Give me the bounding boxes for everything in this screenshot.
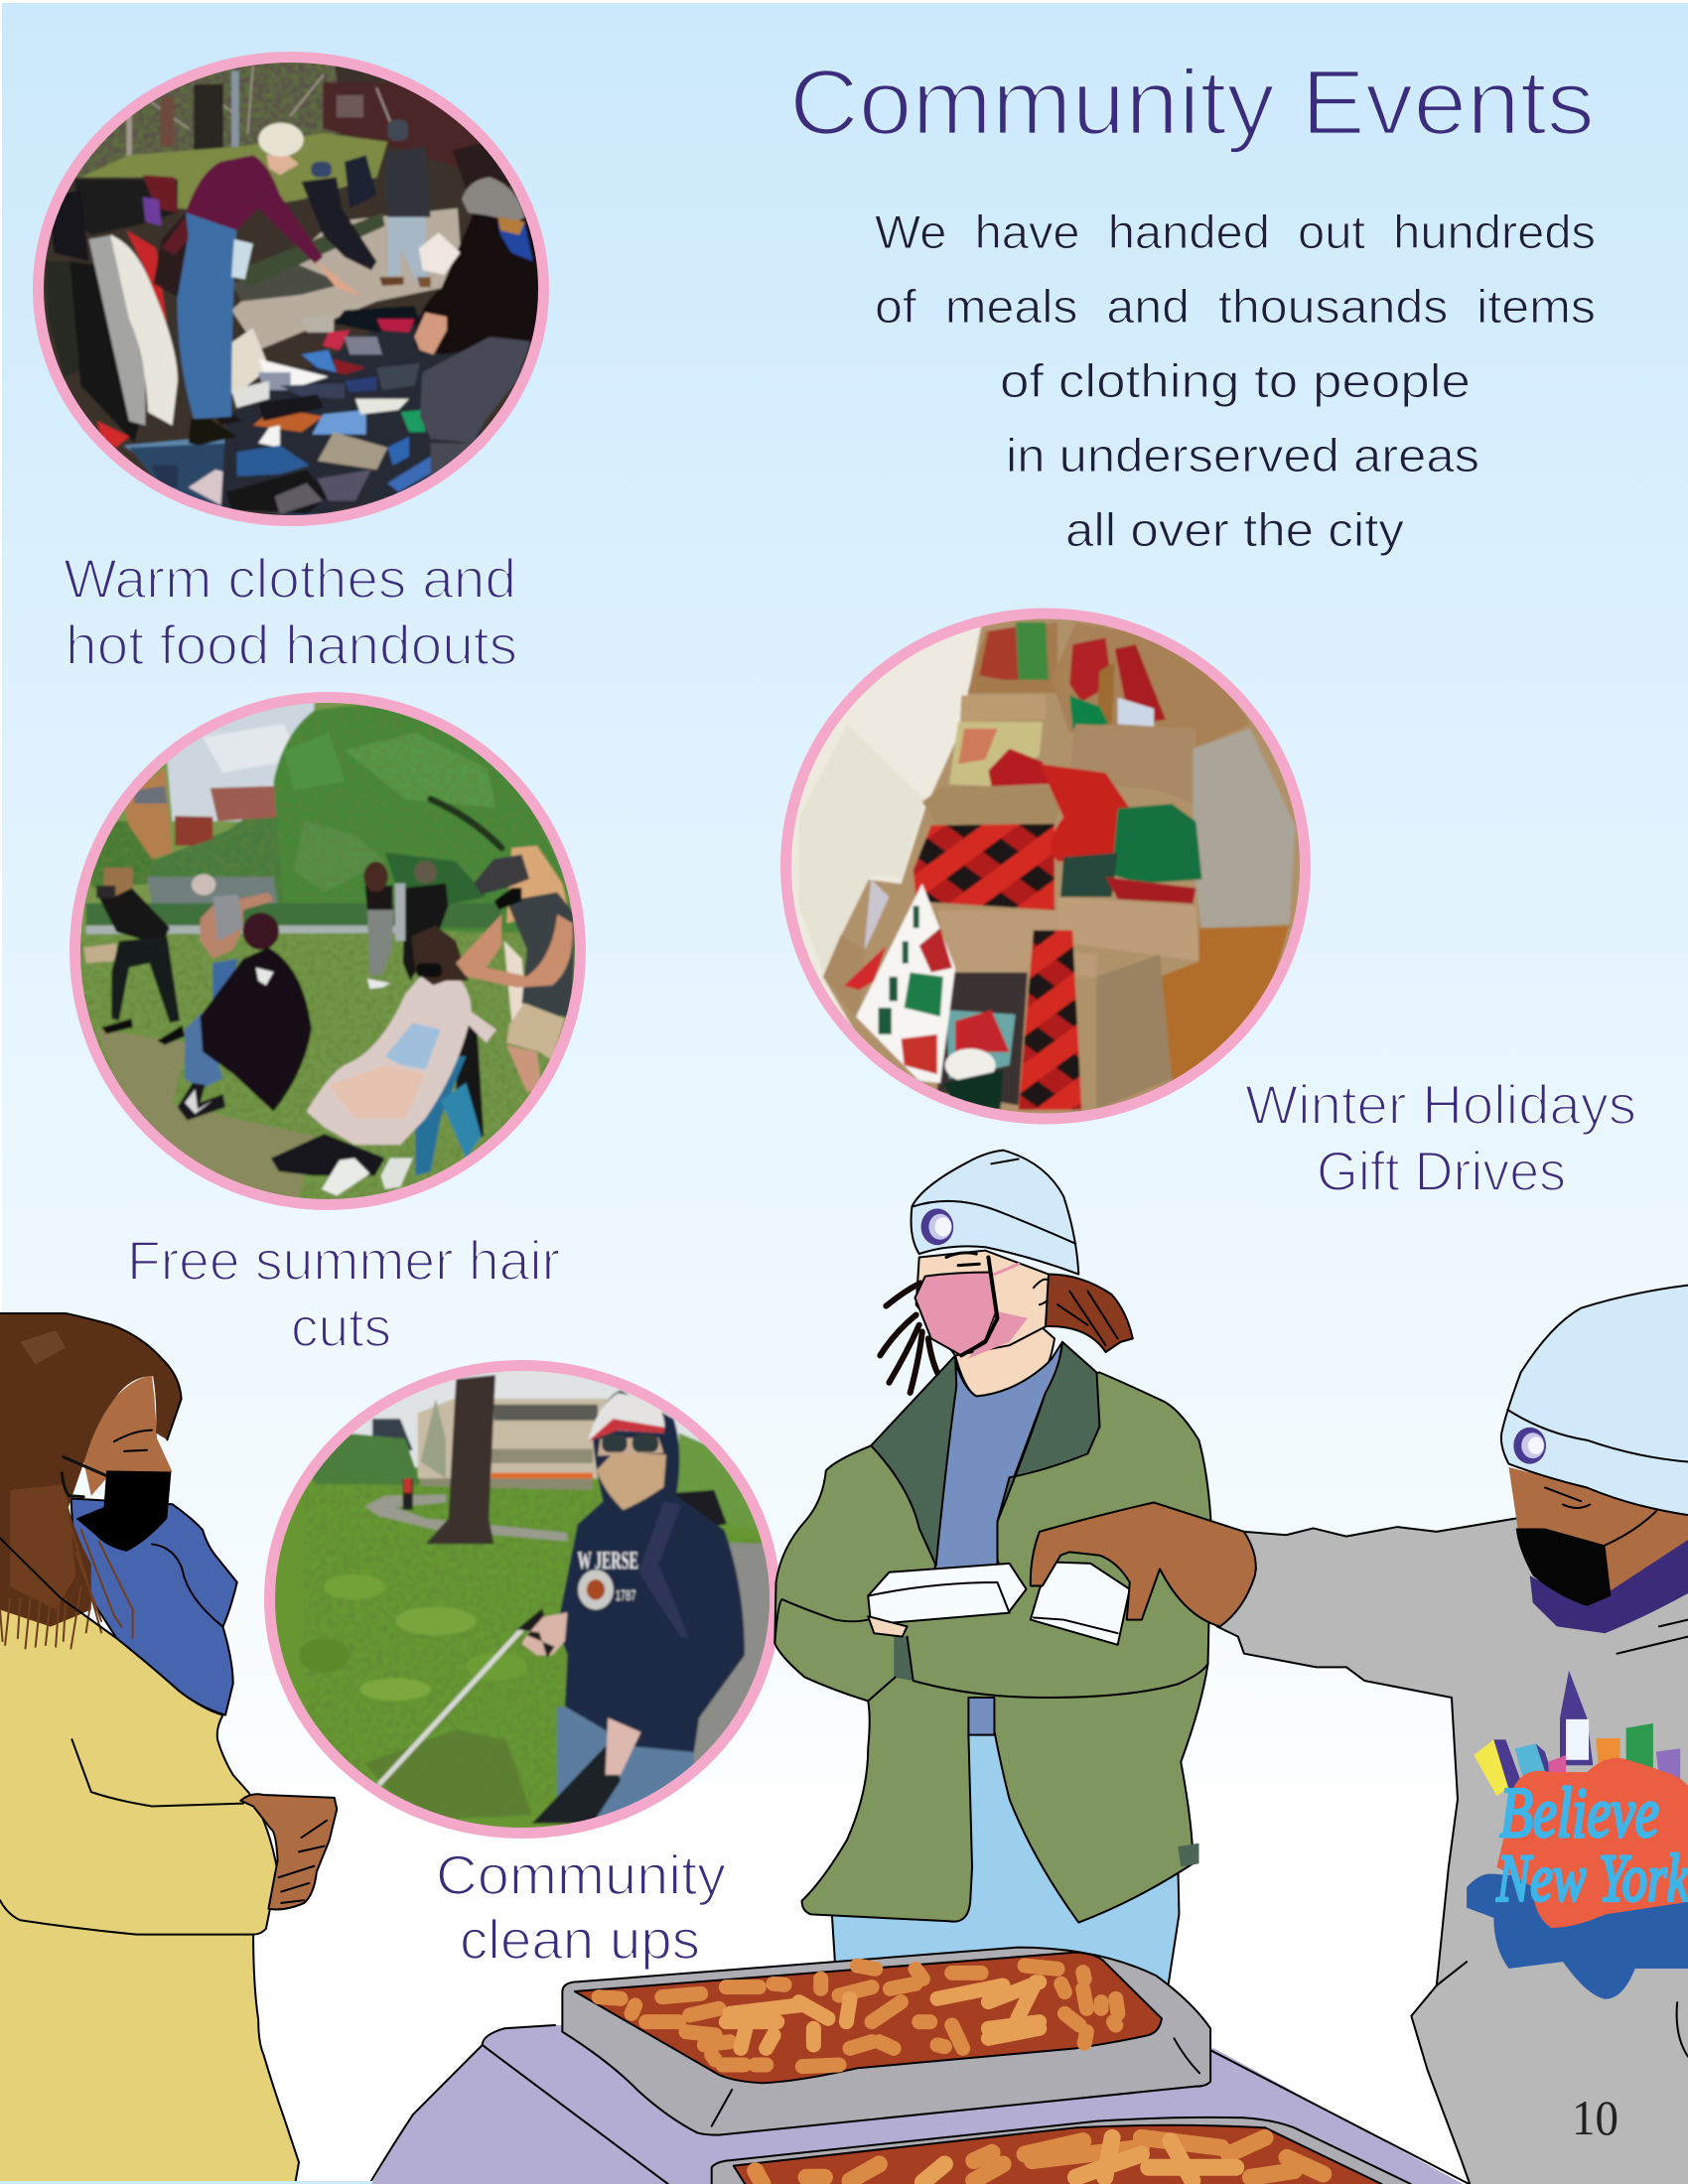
table	[369, 2025, 1469, 2184]
mask	[1516, 1528, 1611, 1606]
hat badge	[1513, 1428, 1546, 1464]
bottom edge strip	[0, 2181, 372, 2184]
caption: community clean ups: clean ups	[460, 1908, 700, 1971]
photo panel: holiday gifts	[780, 608, 1311, 1124]
hair	[0, 1313, 182, 1627]
text block: intro paragraph	[875, 205, 1596, 556]
scarf	[70, 1499, 237, 1715]
caption: community clean ups	[436, 1843, 726, 1971]
arm and hand	[1031, 1503, 1256, 1626]
mask	[914, 1272, 996, 1355]
caption: warm clothes	[64, 547, 517, 676]
collar	[1530, 1535, 1688, 1633]
face	[83, 1376, 172, 1496]
caption: winter holidays: Winter Holidays	[1245, 1073, 1636, 1136]
photo panel: summer hair cuts	[51, 688, 608, 1220]
photo panel: community clean up: W JERSE	[578, 1548, 638, 1574]
caption: summer hair cuts	[127, 1229, 560, 1358]
jacket	[774, 1372, 1211, 1923]
back tray food	[575, 1953, 1162, 2083]
food box left	[868, 1564, 1027, 1624]
coat detail lines	[0, 1739, 253, 1935]
hand under box	[868, 1616, 908, 1637]
caption: summer hair cuts: cuts	[291, 1296, 391, 1358]
back tray noodles	[599, 1966, 1118, 2067]
coat	[0, 1536, 299, 2184]
illustration: woman in yellow coat	[0, 1313, 337, 2184]
mask	[76, 1470, 171, 1552]
front tray food	[734, 2125, 1381, 2184]
face	[1508, 1467, 1688, 1596]
photo ring 1	[38, 58, 544, 520]
hair left	[880, 1283, 937, 1393]
front tray	[712, 2117, 1411, 2184]
caption: summer hair cuts: Free summer hair	[127, 1229, 560, 1292]
title: Community Events	[789, 51, 1595, 154]
hat badge	[921, 1208, 953, 1245]
sweatshirt	[1217, 1515, 1688, 2184]
hair right	[1046, 1275, 1133, 1352]
face	[916, 1251, 1049, 1355]
text block: intro paragraph: all over the city	[1065, 503, 1405, 556]
glasses	[62, 1457, 106, 1497]
caption: winter holidays: Gift Drives	[1317, 1140, 1566, 1202]
neck	[955, 1314, 1055, 1396]
caption: community clean ups: Community	[436, 1843, 726, 1906]
inner lining	[894, 1637, 914, 1681]
jacket creases	[774, 1522, 1208, 1701]
photo panel: clothing handout	[33, 52, 549, 526]
text block: intro paragraph: of clothing to people	[1000, 354, 1471, 407]
collar	[871, 1355, 956, 1566]
hat	[912, 1151, 1078, 1275]
page number: 10	[1572, 2090, 1618, 2145]
hair strands	[0, 1519, 133, 1648]
photo ring 3	[786, 614, 1305, 1119]
photo panel: community clean up	[258, 1353, 795, 1843]
text block: intro paragraph: of meals and thousands items	[875, 280, 1596, 333]
hat	[1501, 1285, 1688, 1516]
shirt logo: Believe New York	[1467, 1671, 1688, 1999]
photo panel: community clean up: 1787	[616, 1587, 635, 1603]
shirt logo: Believe New York: Believe	[1499, 1773, 1659, 1852]
food box right	[1031, 1563, 1130, 1645]
illustration: person in grey sweatshirt	[1031, 1285, 1688, 2184]
back tray	[562, 1948, 1210, 2135]
illustration: serving table with food trays	[369, 1948, 1469, 2184]
hand	[240, 1794, 337, 1910]
caption: winter holidays	[1245, 1073, 1636, 1202]
text block: intro paragraph: We have handed out hundreds	[875, 205, 1596, 258]
caption: warm clothes: Warm clothes and	[64, 547, 516, 610]
caption: warm clothes: hot food handouts	[66, 614, 517, 676]
text block: intro paragraph: in underserved areas	[1006, 429, 1479, 481]
illustration: person in green jacket	[774, 1151, 1211, 1988]
photo ring 2	[75, 697, 580, 1205]
fold lines	[1437, 1620, 1688, 2057]
hair-coat line	[0, 1536, 116, 1638]
photo ring 4	[270, 1366, 774, 1833]
t-shirt	[934, 1342, 1062, 1569]
trousers	[832, 1731, 1179, 1988]
front tray noodles	[756, 2137, 1324, 2184]
